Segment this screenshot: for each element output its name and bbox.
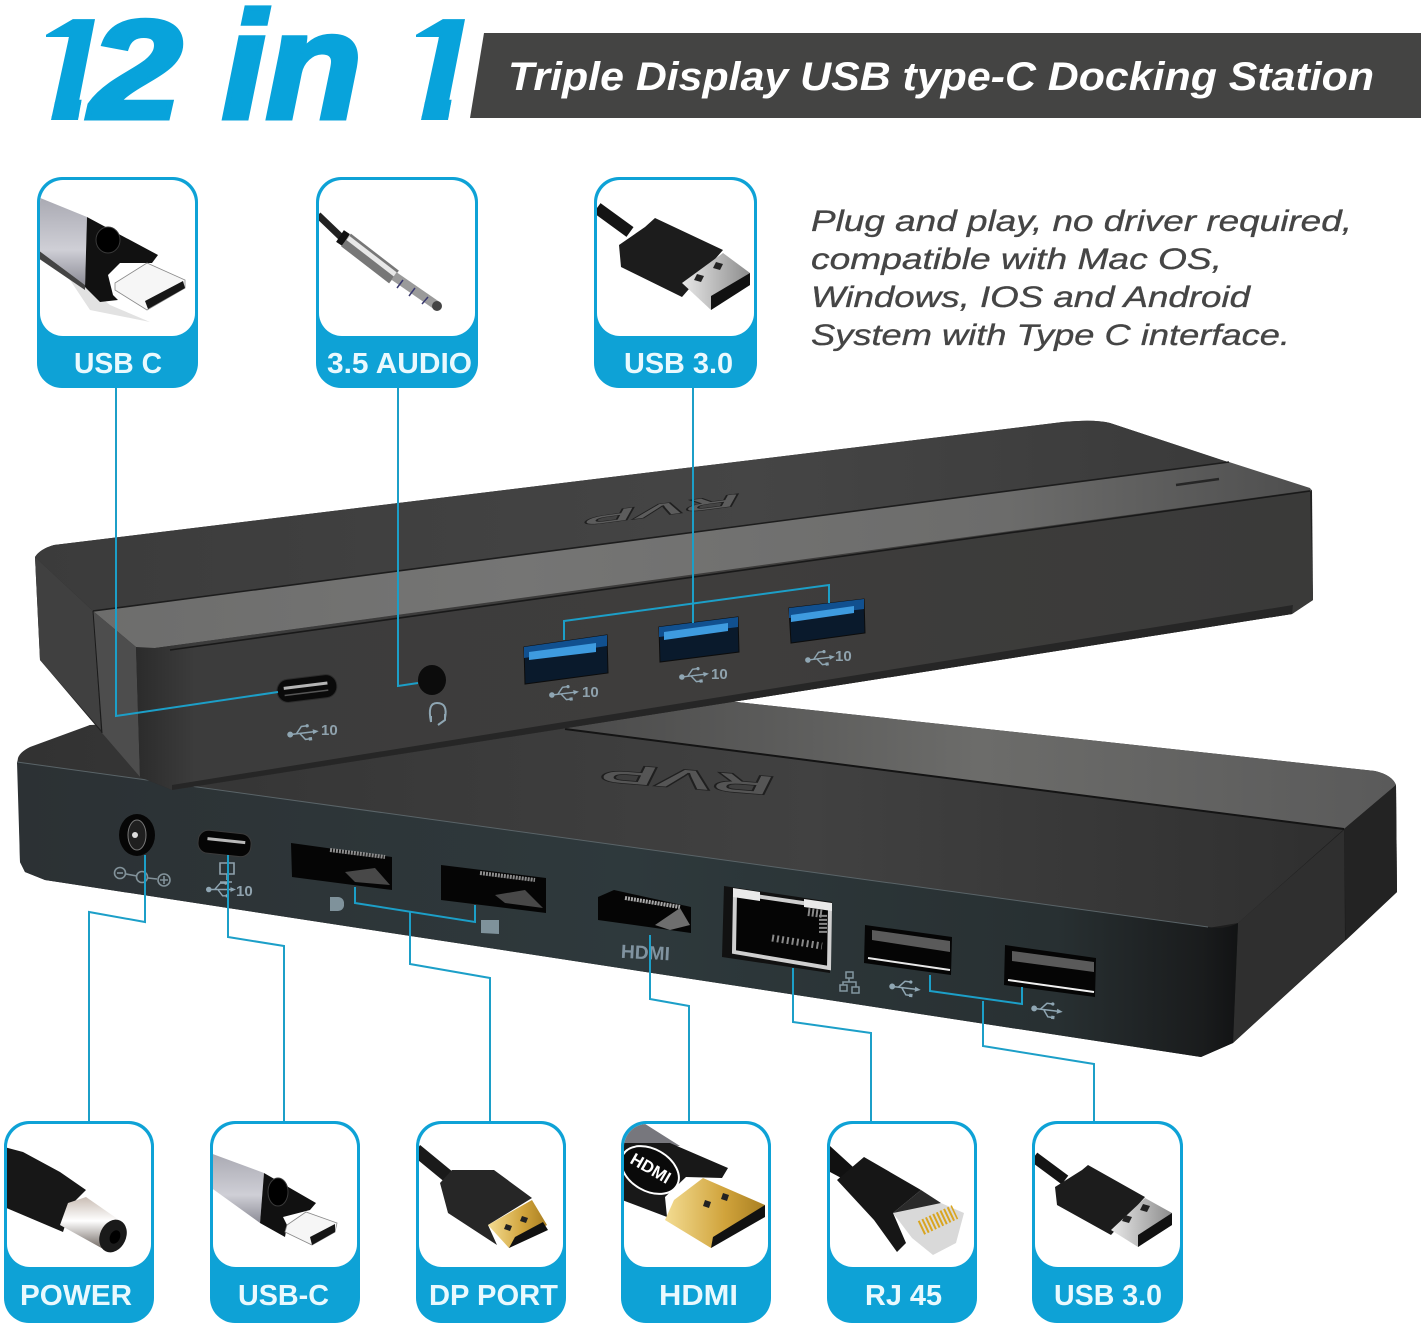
icon: usb 10 under USB-C [286, 722, 338, 743]
USB 3.0 port right [789, 599, 865, 643]
label: 3.5 AUDIO [327, 348, 472, 380]
icon: usb 1 [888, 978, 922, 998]
lower dock silhouette [18, 698, 1397, 1057]
upper dock front face [136, 490, 1313, 790]
icon: usb 10 right [804, 648, 852, 668]
icon: usb 10 right: 10 [835, 648, 852, 665]
picture: USB-C plug [38, 197, 185, 322]
upper dock light strip [93, 462, 1312, 649]
card: 3.5 audio [316, 177, 478, 388]
banner: Triple Display USB type-C Docking Station: Triple Display USB type-C Docking Station [508, 55, 1374, 99]
label: USB 3.0 [1054, 1280, 1162, 1312]
label: DP PORT [429, 1280, 558, 1312]
description text block: compatible with Mac OS, [811, 243, 1222, 276]
card: RJ 45 [827, 1121, 977, 1323]
description text block: Plug and play, no driver required, [811, 205, 1352, 238]
description text block [811, 205, 1352, 352]
lower dock front face [17, 762, 1238, 1057]
LED indicator [1176, 479, 1219, 485]
picture: HDMI plug [613, 1122, 765, 1248]
icon: usb 2 [1030, 1000, 1064, 1020]
label: USB C [74, 348, 162, 380]
USB-A port 1 [864, 925, 952, 975]
icon: headphones [430, 703, 446, 725]
description text block: System with Type C interface. [811, 319, 1290, 352]
DisplayPort right [441, 865, 546, 913]
USB-C port lower [197, 829, 252, 858]
RJ45 port [722, 886, 832, 973]
power jack [119, 814, 155, 856]
upper docking station [35, 421, 1313, 790]
icon: network [840, 972, 859, 993]
lower dock top face main [17, 725, 1344, 928]
label: POWER [20, 1280, 132, 1312]
upper dock silhouette [35, 421, 1313, 790]
upper dock left side panels [35, 557, 101, 730]
lower docking station [17, 698, 1397, 1057]
title: 12 in 1 [46, 5, 465, 120]
label: USB 3.0 [624, 348, 733, 380]
lower dock top face strip [560, 698, 1396, 829]
USB 3.0 port left [524, 635, 608, 684]
label: HDMI [659, 1280, 738, 1312]
picture: audio jack plug [318, 215, 442, 311]
USB-C port upper [276, 673, 338, 704]
label: USB-C [238, 1280, 329, 1312]
audio jack [418, 665, 446, 695]
connector lines [89, 388, 1094, 1121]
DisplayPort left [291, 843, 392, 890]
icon: power polarity [114, 868, 170, 886]
icon: usb 10 middle: 10 [711, 666, 728, 683]
USB-A port 2 [1004, 945, 1096, 997]
lower dock right end panels [1344, 785, 1397, 940]
picture: USB-C plug [210, 1153, 337, 1245]
card: USB-C bottom [210, 1121, 360, 1323]
card: HDMI [613, 1121, 771, 1323]
upper dock top face [35, 421, 1231, 611]
icon: usb 10 left [548, 684, 599, 703]
icon: thunderbolt USB label [206, 863, 253, 900]
picture: DC barrel plug [7, 1148, 127, 1252]
icon: thunderbolt USB label: 10 [236, 883, 253, 900]
icon: usb 10 left: 10 [582, 684, 599, 701]
card: POWER [4, 1121, 154, 1323]
picture: HDMI plug: HDMI [627, 1149, 674, 1188]
HDMI text: HDMI [620, 942, 670, 965]
label: RJ 45 [865, 1280, 942, 1312]
picture: USB-A plug [597, 208, 750, 310]
card: USB 3.0 top [594, 177, 757, 388]
icon: usb 10 middle [678, 666, 728, 685]
card: DP PORT [416, 1121, 566, 1323]
logo: RVP on lower dock: RVP [594, 758, 781, 801]
picture: RJ45 plug [830, 1146, 964, 1255]
description text block: Windows, IOS and Android [811, 281, 1252, 314]
USB 3.0 port middle [659, 617, 739, 662]
picture: DisplayPort plug [416, 1150, 548, 1248]
logo: RVP on upper dock: RVP [579, 489, 745, 529]
icon: DP labels [330, 897, 499, 934]
HDMI port [598, 890, 691, 933]
banner: Triple Display USB type-C Docking Station [470, 33, 1421, 118]
card: USB C top [37, 177, 198, 388]
icon: usb 10 under USB-C: 10 [321, 722, 338, 739]
picture: USB-A plug [1034, 1157, 1172, 1247]
card: USB 3.0 bottom [1032, 1121, 1183, 1323]
